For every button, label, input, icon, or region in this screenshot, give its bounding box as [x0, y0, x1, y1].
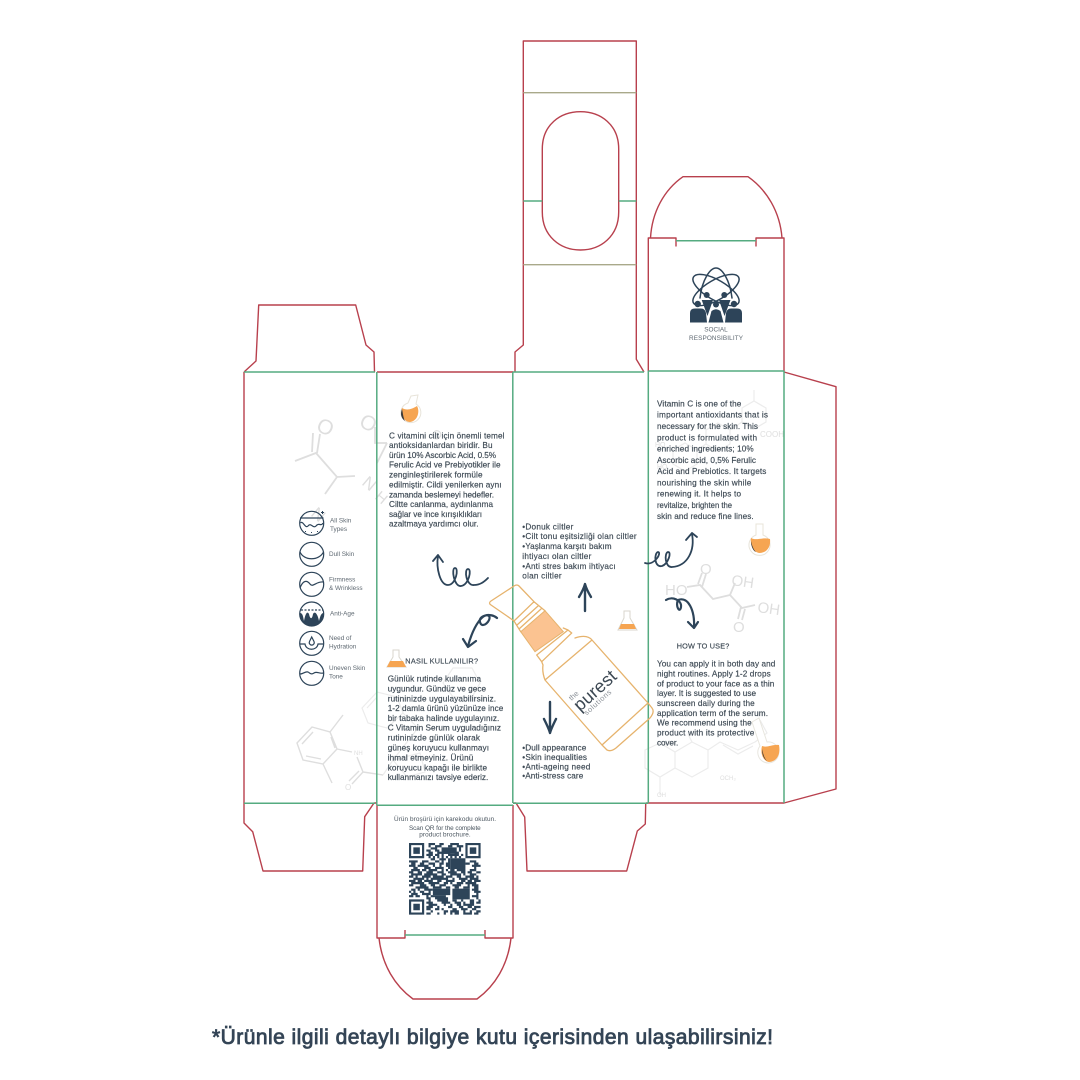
label: social responsibility: RESPONSIBILITY: [689, 335, 744, 342]
icon: firmness and wrinkless: [300, 572, 324, 596]
label: dull skin: Dull Skin: [329, 551, 355, 558]
background molecule: lower right rings: OCH₃: [720, 776, 736, 782]
text block: English description: product is formulated with: [657, 433, 757, 442]
bottle outline: [490, 585, 653, 751]
text block: English description: nourishing the skin while: [657, 478, 752, 487]
background molecule: left panel amino structure: N: [358, 473, 380, 495]
background molecule: malic acid: OH: [730, 572, 755, 592]
icon: need of hydration: [300, 631, 324, 655]
text block: Turkish how to use: 1-2 damla ürünü yüzünüze ince: [388, 704, 504, 713]
arrow: curl down to how to use: [463, 615, 497, 647]
background molecule: malic acid: [665, 561, 781, 636]
footer note: *Ürünle ilgili detaylı bilgiye kutu içerisinden ulaşabilirsiniz!: [212, 1026, 773, 1049]
background molecule: left panel amino structure: O: [356, 410, 380, 437]
text block: Turkish bullet list: •Yaşlanma karşıtı bakım: [522, 542, 612, 551]
text block: English how to use: product with its protective: [657, 729, 755, 738]
background molecule: left panel amino structure: [295, 410, 445, 526]
background molecule: lower right rings: [645, 720, 767, 799]
text block: QR instructions: product brochure.: [419, 832, 471, 838]
icon: tilted round flask lower right: [752, 718, 779, 763]
text block: English how to use: application term of the serum.: [657, 709, 768, 718]
text block: English how to use: layer. It is suggested to use: [657, 689, 756, 698]
background molecule: lower left ring structure: [297, 668, 480, 792]
text block: Turkish description: zenginleştirilerek formüle: [389, 471, 483, 480]
icon: social responsibility: [688, 268, 744, 322]
text block: English description: renewing it. It helps to: [657, 490, 741, 499]
text block: Turkish how to use: bir tabaka halinde uygulayınız.: [388, 714, 499, 723]
text block: Turkish how to use: Günlük rutinde kullanıma: [388, 674, 481, 683]
text block: Turkish description: sağlar ve ince kırışıklıkları: [389, 510, 482, 519]
icon: anti-age: [300, 602, 324, 626]
text block: English description: enriched ingredients; 10%: [657, 445, 754, 454]
background molecule: malic acid: OH: [756, 599, 781, 619]
text block: English description: revitalize, brighten the: [657, 501, 732, 510]
background molecule: left panel amino structure: O: [313, 414, 337, 441]
background molecule: left panel amino structure: N: [307, 504, 329, 526]
text block: English bullet list: •Dull appearance: [522, 744, 587, 753]
text block: English how to use: cover.: [657, 738, 678, 747]
text block: Turkish description: Ferulic Acid ve Prebiyotikler ile: [389, 461, 501, 470]
text block: English how to use: sunscreen daily during the: [657, 699, 755, 708]
text block: Turkish description: [389, 432, 505, 529]
QR code: [409, 843, 481, 915]
text block: English how to use: You can apply it in both day and: [657, 660, 776, 669]
text block: Turkish how to use: koruyucu kapağı ile birlikte: [388, 763, 487, 772]
text block: Turkish bullet list: •Donuk ciltler: [522, 522, 574, 531]
bottle label: brand: purest: [569, 666, 621, 715]
text block: English description: necessary for the skin. This: [657, 422, 758, 431]
text block: English description: Ascorbic acid, 0,5% Ferulic: [657, 456, 756, 465]
text block: Turkish bullet list: •Anti stres bakım ihtiyacı: [522, 562, 616, 571]
arrow: curl down right: [666, 598, 698, 628]
label: uneven skin tone: Uneven Skin: [329, 665, 365, 672]
arrow: straight down: [544, 702, 556, 733]
background molecule: lower right rings: OH: [657, 793, 666, 799]
label: firmness and wrinkless: & Wrinkless: [329, 585, 363, 592]
text block: English how to use: We recommend using the: [657, 719, 752, 728]
text block: Turkish how to use: [388, 674, 504, 782]
text block: QR instructions: Ürün broşürü için karekodu okutun.: [394, 815, 496, 823]
text block: Turkish how to use: C Vitamin Serum uyguladığınız: [388, 724, 501, 733]
text block: English bullet list: •Skin inequalities: [522, 753, 587, 762]
text block: English bullet list: •Anti-stress care: [522, 772, 584, 781]
label: anti-age: Anti-Age: [330, 610, 355, 617]
text block: English description: Vitamin C is one of the: [657, 400, 742, 409]
text block: English description: skin and reduce fine lines.: [657, 512, 754, 521]
text block: Turkish description: antioksidanlardan biridir. Bu: [389, 441, 493, 450]
label: all skin types: Types: [330, 526, 347, 533]
background molecule: malic acid: O: [700, 561, 712, 578]
text block: Turkish description: edilmiştir. Cildi yenilerken aynı: [389, 480, 502, 489]
panel: skin type icons: [300, 511, 366, 685]
text block: QR instructions: Scan QR for the complete: [409, 825, 481, 832]
product bottle illustration: [490, 585, 653, 751]
arrow: curly up left: [433, 555, 488, 586]
text block: Turkish bullet list: olan ciltler: [522, 572, 562, 581]
label: firmness and wrinkless: Firmness: [329, 576, 355, 583]
text block: Turkish how to use: uygundur. Gündüz ve gece: [388, 684, 486, 693]
icon: dull skin: [300, 542, 324, 566]
text block: English description: important antioxidants that is: [657, 411, 768, 420]
label: need of hydration: Need of: [329, 635, 351, 642]
background molecule: left panel amino structure: H: [371, 488, 391, 508]
text block: Turkish bullet list: •Cilt tonu eşitsizliği olan ciltler: [522, 532, 637, 541]
text block: Turkish how to use: rutininizde günlük olarak: [388, 734, 481, 743]
label: social responsibility: SOCIAL: [704, 327, 728, 334]
label: need of hydration: Hydration: [329, 643, 357, 650]
text block: English description: [657, 400, 768, 521]
text block: Turkish how to use: ihmal etmeyiniz. Ürünü: [388, 752, 474, 762]
dieline: cut lines: [244, 41, 836, 999]
background molecule: upper right COOH: HO: [657, 464, 668, 471]
icon: erlenmeyer flask left: [387, 650, 406, 667]
text block: English description: Acid and Prebiotics. It targets: [657, 467, 766, 476]
text block: Turkish description: Ciltte canlanma, aydınlanma: [389, 500, 493, 509]
text block: Turkish how to use: güneş koruyucu kullanmayı: [388, 743, 489, 752]
label: all skin types: All Skin: [330, 517, 351, 524]
label: uneven skin tone: Tone: [329, 673, 343, 680]
text block: English bullet list: •Anti-ageing need: [522, 762, 591, 771]
bottle collar: [521, 611, 563, 652]
arrow: straight up: [579, 584, 591, 611]
text block: Turkish description: azaltmaya yardımcı olur.: [389, 520, 478, 529]
bottle label: brand: the: [567, 689, 581, 702]
background molecule: lower left ring structure: O: [345, 783, 351, 792]
background molecule: left panel amino structure: O: [428, 426, 445, 444]
icon: round flask upper left: [401, 395, 421, 423]
text block: Turkish description: ürün 10% Ascorbic Acid, 0.5%: [389, 451, 496, 460]
text block: Turkish how to use: rutininizde uygulayabilirsiniz.: [388, 694, 496, 703]
text block: Turkish description: zamanda beslemeyi hedefler.: [389, 490, 494, 499]
heading: how to use: HOW TO USE?: [677, 641, 729, 650]
dieline: fold lines: [244, 93, 784, 935]
icon: erlenmeyer flask middle: [618, 611, 637, 630]
text block: English how to use: of product to your face as a thin: [657, 679, 775, 688]
icon: all skin types: [300, 511, 324, 535]
background molecule: upper right COOH: HO: [655, 442, 666, 449]
text block: Turkish description: C vitamini cilt için önemli temel: [389, 432, 505, 440]
background molecule: lower left ring structure: NH: [354, 751, 363, 757]
background molecule: malic acid: O: [733, 619, 745, 636]
text block: Turkish bullet list: [522, 522, 637, 581]
text block: English how to use: night routines. Apply 1-2 drops: [657, 670, 771, 679]
arrow: curly up right: [645, 533, 697, 567]
background molecule: upper right COOH: [655, 390, 784, 471]
background molecule: upper right COOH: COOH: [760, 430, 784, 439]
icon: round flask right: [749, 524, 770, 555]
text block: Turkish bullet list: ihtiyacı olan ciltler: [522, 552, 592, 561]
icon: uneven skin tone: [300, 661, 324, 685]
text block: English how to use: [657, 660, 776, 747]
background molecule: malic acid: HO: [665, 582, 688, 599]
text block: QR instructions: [394, 815, 496, 838]
heading: nasil kullanilir: NASIL KULLANILIR?: [405, 656, 478, 665]
bottle label: brand: solutions: [582, 687, 613, 717]
text block: Turkish how to use: kullanmanızı tavsiye ederiz.: [388, 773, 488, 782]
text block: English bullet list: [522, 744, 591, 781]
